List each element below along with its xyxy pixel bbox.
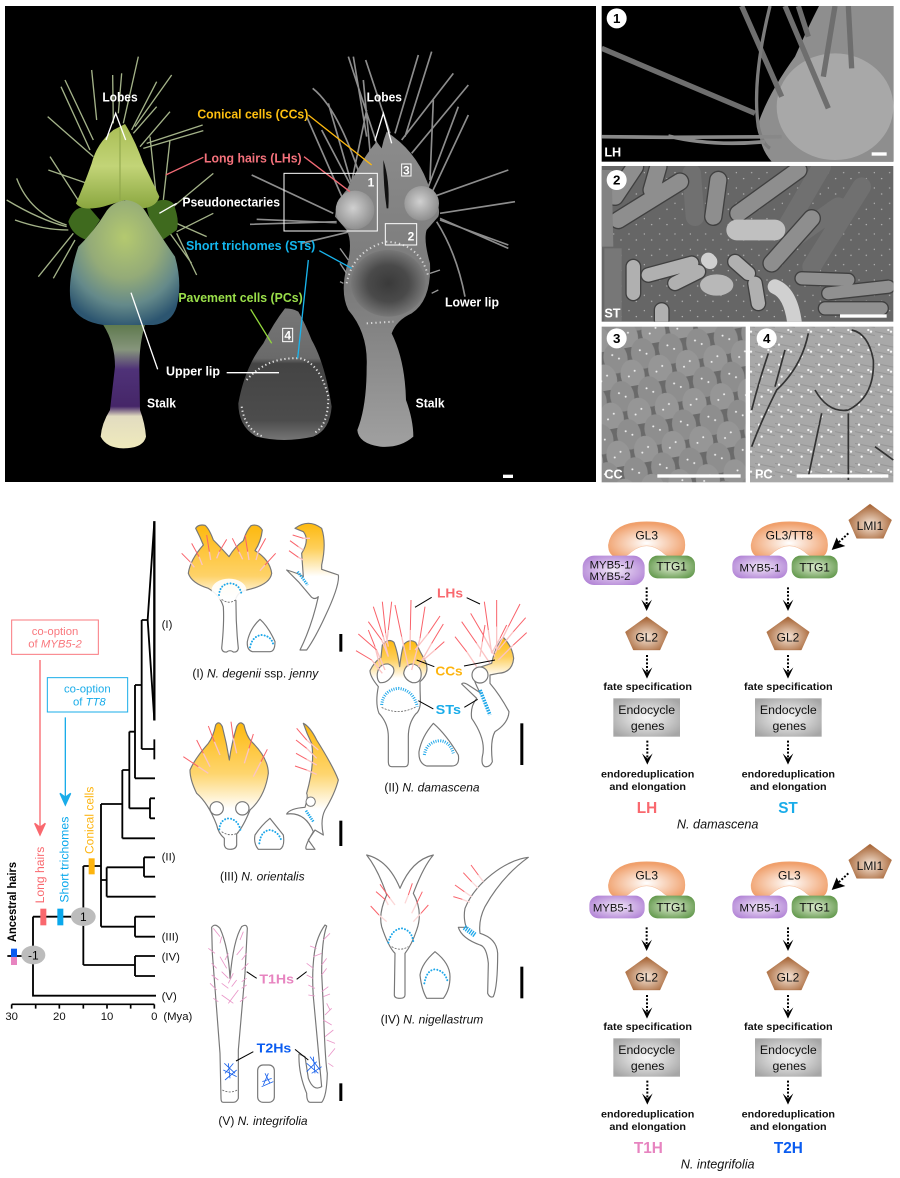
inset numbers: 4	[284, 328, 291, 342]
close-up 1: long hair: LH	[604, 146, 621, 160]
scale bar	[339, 1083, 342, 1101]
vertical trait labels	[5, 787, 96, 942]
top panel labels: Lobes	[102, 90, 138, 104]
model T1H	[589, 862, 695, 1157]
model T2H: fate specification	[744, 1022, 833, 1033]
species label: N. damascena	[677, 817, 758, 831]
panel: species schematics III label, IV, V	[208, 855, 528, 1128]
model T2H: endoreduplication	[742, 1109, 835, 1120]
model LH: MYB5-2	[590, 571, 630, 583]
model ST: endoreduplication	[742, 769, 835, 780]
close-up 2: short trichomes: 2	[613, 173, 620, 188]
character bars	[11, 858, 95, 965]
axis labels: 0	[151, 1011, 157, 1023]
scale bar	[339, 634, 342, 652]
callout: co-option of MYB5-2: co-option	[32, 626, 78, 638]
model T1H: genes	[631, 1059, 664, 1073]
model ST: GL3/TT8	[766, 528, 813, 542]
model LH	[583, 522, 695, 817]
schematic II: N. damascena: STs	[436, 702, 461, 717]
model T2H: MYB5-1	[740, 902, 780, 914]
schematic V: N. integrifolia	[208, 925, 342, 1128]
model ST: TTG1	[799, 560, 830, 574]
model T1H: and elongation	[609, 1122, 686, 1133]
panel: photo and SEM of the petal	[5, 6, 596, 482]
species label: N. integrifolia	[681, 1157, 755, 1171]
model LH: Endocycle	[618, 703, 675, 717]
model ST: GL2	[777, 631, 800, 645]
vertical trait labels: Short trichomes	[57, 817, 71, 903]
vertical trait labels: Conical cells	[82, 787, 96, 854]
green flower photograph	[7, 57, 213, 448]
arrow: MYB5-2 to long hairs	[35, 660, 45, 835]
top panel labels: Conical cells (CCs)	[197, 107, 308, 121]
chart: phylogeny with time axis	[5, 522, 193, 1023]
model T2H: GL2	[777, 971, 800, 985]
close-up 4: pavement cells	[750, 327, 893, 482]
model ST: fate specification	[744, 682, 833, 693]
close-up 3: conical cells: 3	[613, 331, 620, 346]
inset numbers: 1	[368, 176, 375, 190]
model T2H	[732, 844, 892, 1157]
schematic V: N. integrifolia: T1Hs	[259, 972, 294, 986]
close-up 3: conical cells: CC	[604, 468, 623, 482]
panel: N. damascena regulatory models	[583, 504, 892, 831]
model T2H: T2H	[774, 1140, 803, 1157]
SEM lower lip and stalk	[250, 52, 515, 447]
axis labels	[5, 1011, 193, 1023]
model T1H: endoreduplication	[601, 1109, 694, 1120]
model LH: genes	[631, 719, 664, 733]
top panel labels: Upper lip	[166, 365, 220, 379]
clade labels: (V)	[162, 991, 177, 1003]
arrow: TT8 to short trichomes	[60, 717, 71, 805]
inset numbers: 2	[408, 230, 415, 244]
top panel labels: Short trichomes (STs)	[186, 239, 315, 253]
clade labels: (IV)	[162, 952, 180, 964]
close-up 1: long hair: 1	[613, 11, 621, 26]
vertical trait labels: Long hairs	[33, 847, 47, 903]
label: N. orientalis: (III) N. orientalis	[220, 870, 305, 884]
model ST: MYB5-1	[740, 562, 780, 574]
close-up 2: short trichomes	[602, 166, 893, 327]
panel: N. integrifolia regulatory models	[589, 844, 892, 1171]
model ST: Endocycle	[760, 703, 817, 717]
top panel labels: Long hairs (LHs)	[204, 151, 302, 165]
model LH: GL3	[635, 528, 658, 542]
top panel labels: Pavement cells (PCs)	[178, 291, 303, 305]
clade labels: (III)	[162, 932, 179, 944]
inset markers	[283, 164, 417, 342]
schematic II: N. damascena: LHs	[437, 585, 463, 600]
close-up 2: short trichomes: ST	[604, 306, 621, 320]
time axis	[12, 1004, 154, 1009]
tree branches	[7, 522, 156, 996]
schematic I: N. degenii	[182, 523, 342, 681]
schematic V: N. integrifolia: T2Hs	[257, 1042, 291, 1056]
schematic I: N. degenii: (I) N. degenii ssp. jenny	[192, 667, 319, 681]
model T2H: GL3	[778, 868, 801, 882]
axis labels: 10	[101, 1011, 113, 1023]
model ST: and elongation	[750, 782, 827, 793]
schematic IV: N. nigellastrum	[367, 855, 528, 1026]
inset numbers	[284, 163, 415, 342]
top panel labels: Lobes	[367, 90, 402, 104]
node: -1: -1	[28, 948, 39, 962]
close-up 4: pavement cells: PC	[755, 468, 773, 482]
model T1H: fate specification	[603, 1022, 692, 1033]
model T2H: genes	[773, 1059, 806, 1073]
labels and leaders	[236, 972, 308, 1061]
top panel labels: Lower lip	[445, 295, 499, 309]
model T1H: MYB5-1	[593, 902, 634, 914]
clade labels	[162, 619, 180, 1003]
model ST: ST	[778, 800, 798, 817]
node: 1: 1	[80, 910, 87, 924]
model LH: MYB5-1/	[590, 559, 635, 571]
labels and leaders	[415, 597, 495, 709]
model T1H: TTG1	[656, 900, 687, 914]
schematic IV: N. nigellastrum: (IV) N. nigellastrum	[381, 1012, 483, 1026]
callout: co-option of TT8	[47, 678, 128, 712]
callout: co-option of MYB5-2	[12, 620, 98, 654]
top panel labels: Pseudonectaries	[182, 195, 280, 209]
model LH: fate specification	[603, 682, 692, 693]
leader lines	[106, 113, 392, 373]
callout: co-option of TT8: of TT8	[73, 697, 106, 709]
inset numbers: 3	[403, 163, 410, 177]
model LH: and elongation	[609, 782, 686, 793]
model ST: genes	[773, 719, 806, 733]
model LH: LH	[637, 800, 657, 817]
model T1H: Endocycle	[618, 1043, 675, 1057]
model T2H: and elongation	[750, 1122, 827, 1133]
axis labels: 30	[5, 1011, 18, 1023]
model LH: TTG1	[656, 560, 687, 574]
SEM upper lip	[238, 308, 332, 440]
callout: co-option of MYB5-2: of MYB5-2	[28, 639, 82, 651]
model LH: endoreduplication	[601, 769, 694, 780]
clade labels: (I)	[162, 619, 173, 631]
scale bar	[520, 723, 523, 765]
panel: SEM close-ups	[602, 6, 893, 482]
schematic II: N. damascena: (II) N. damascena	[384, 781, 480, 795]
model T1H: GL3	[635, 868, 658, 882]
model LH: GL2	[635, 631, 658, 645]
close-up 1: long hair	[602, 6, 893, 162]
model ST: LMI1	[857, 519, 884, 533]
schematic II: N. damascena: CCs	[435, 664, 463, 679]
scale bar	[339, 821, 342, 846]
top panel labels	[102, 90, 499, 410]
model T1H: T1H	[634, 1140, 663, 1157]
top panel labels: Stalk	[147, 396, 177, 410]
collapsed clade I	[154, 522, 155, 720]
model T2H: TTG1	[799, 900, 830, 914]
close-up 4: pavement cells: 4	[763, 331, 771, 346]
model T1H: GL2	[635, 971, 658, 985]
model T2H: Endocycle	[760, 1043, 817, 1057]
schematic II: N. damascena	[356, 585, 527, 795]
axis labels: 20	[53, 1011, 66, 1023]
callout: co-option of TT8: co-option	[64, 684, 111, 696]
scale bar	[503, 475, 513, 478]
vertical trait labels: Ancestral hairs	[5, 862, 19, 942]
schematic V: N. integrifolia: (V) N. integrifolia	[218, 1114, 308, 1128]
top panel labels: Stalk	[416, 396, 446, 410]
model T2H: LMI1	[857, 859, 884, 873]
close-up 3: conical cells	[602, 327, 746, 482]
panel: species schematics I, II, III	[182, 523, 527, 849]
node: 1	[71, 907, 96, 926]
axis labels: (Mya)	[163, 1011, 193, 1023]
clade labels: (II)	[162, 852, 176, 864]
schematic III: N. orientalis	[183, 722, 342, 849]
model ST	[732, 504, 892, 817]
scale bar	[520, 967, 523, 998]
node: -1	[21, 946, 45, 964]
